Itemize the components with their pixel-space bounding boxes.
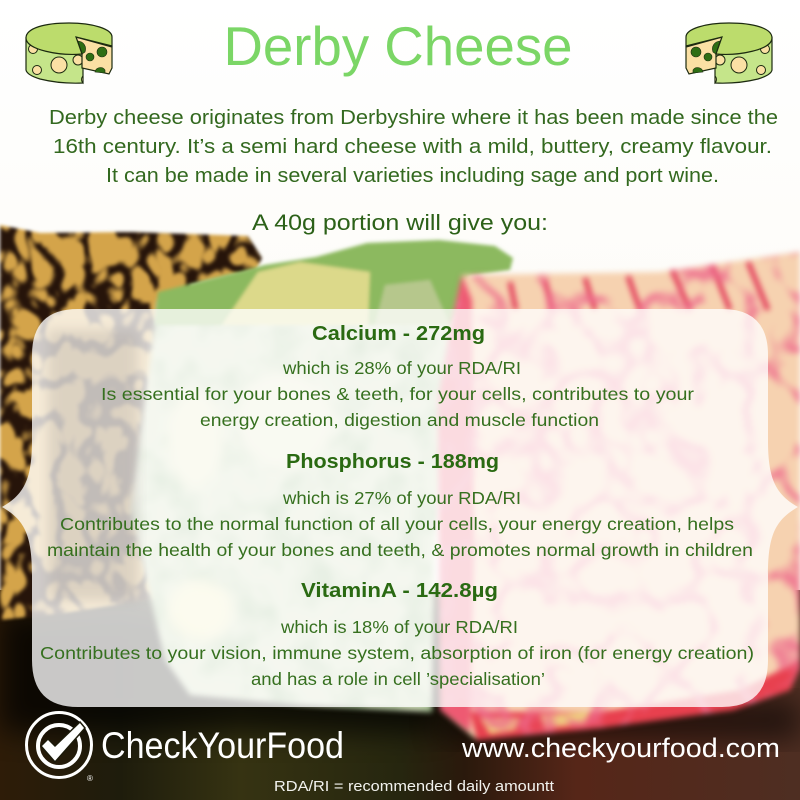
nutrient: vitamin A [40, 580, 754, 689]
photo: marbled brown cheese [0, 225, 262, 620]
intro text: It can be made in several varieties including sage and port wine. [106, 165, 719, 187]
nutrient: phosphorus: Phosphorus - 188mg [286, 451, 499, 473]
background: white upper area [0, 0, 800, 640]
intro text: 16th century. It’s a semi hard cheese with a mild, buttery, creamy flavour. [53, 136, 772, 158]
logo: CheckYourFood [26, 712, 344, 783]
background: dark table surface [0, 590, 800, 800]
nutrient: phosphorus: which is 27% of your RDA/RI [282, 488, 521, 508]
icon: cheese wheel right [686, 23, 772, 83]
nutrient: vitamin A: which is 18% of your RDA/RI [280, 617, 518, 637]
nutrient: calcium: which is 28% of your RDA/RI [282, 358, 521, 378]
nutrient: calcium: Is essential for your bones & teeth, for your cells, contributes to your [101, 384, 694, 404]
logo: CheckYourFood: CheckYourFood [101, 725, 344, 766]
nutrient: vitamin A: Contributes to your vision, immune system, absorption of iron (for energy creation) [40, 643, 754, 663]
website url: www.checkyourfood.com [461, 733, 780, 763]
icon: cheese wheel left [26, 23, 112, 83]
subheading: portion: A 40g portion will give you: [252, 210, 548, 235]
footnote: RDA/RI = recommended daily amountt [274, 779, 554, 795]
nutrient: calcium: energy creation, digestion and muscle function [200, 410, 599, 430]
intro text [49, 107, 778, 187]
title: Derby Cheese [224, 15, 572, 77]
nutrient: phosphorus [47, 451, 753, 560]
nutrient: phosphorus: maintain the health of your bones and teeth, & promotes normal growth in children [47, 540, 753, 560]
nutrient: vitamin A: VitaminA - 142.8µg [301, 580, 498, 602]
panel tint over brown cheese [48, 330, 138, 600]
nutrient: calcium: Calcium - 272mg [312, 323, 485, 345]
translucent info panel [2, 309, 798, 707]
photo: green sage cheese [130, 240, 513, 712]
photo: red port wine cheese [438, 252, 800, 740]
logo: CheckYourFood: ® [87, 774, 93, 783]
nutrient: calcium [101, 323, 694, 430]
nutrient: phosphorus: Contributes to the normal function of all your cells, your energy creation, helps [60, 514, 734, 534]
intro text: Derby cheese originates from Derbyshire where it has been made since the [49, 107, 778, 129]
nutrient: vitamin A: and has a role in cell ’specialisation’ [251, 669, 545, 689]
